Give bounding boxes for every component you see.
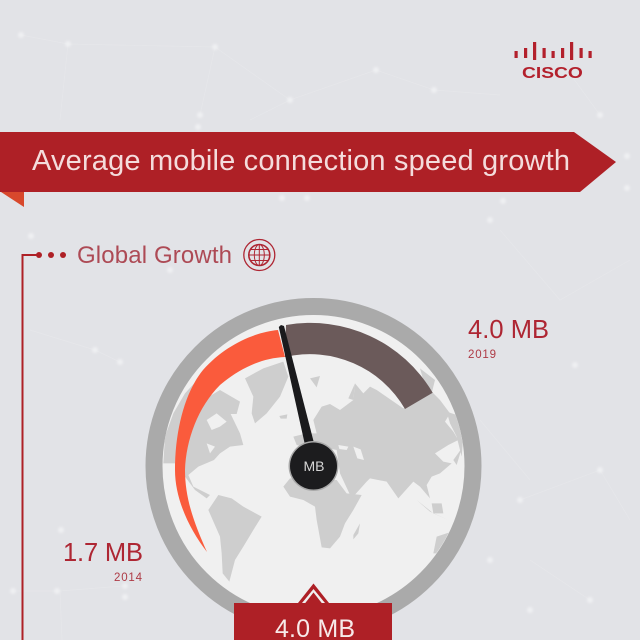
arc: 2019 target [285, 323, 433, 409]
title: Average mobile connection speed growth [32, 145, 570, 177]
logo: Cisco [514, 42, 592, 82]
connector line and dots [22, 252, 66, 640]
gauge [154, 306, 473, 626]
label: 2019 [468, 316, 549, 361]
heading: Global Growth: Global Growth [77, 242, 232, 269]
label: 2014: 1.7 MB [63, 539, 143, 567]
title banner [0, 132, 616, 207]
label: 2014: 2014 [114, 572, 143, 584]
label: 2019: 4.0 MB [468, 316, 549, 344]
world map [163, 362, 463, 582]
hub [288, 441, 338, 491]
logo: Cisco: CISCO [522, 64, 583, 82]
hub: MB [304, 458, 324, 474]
label: 2019: 2019 [468, 349, 496, 361]
needle [279, 325, 314, 445]
gauge ring [154, 306, 473, 626]
arc: 2014 to current [175, 330, 285, 552]
callout: current speed [234, 584, 392, 640]
icon: globe [244, 240, 275, 270]
label: 2014 [63, 539, 143, 584]
